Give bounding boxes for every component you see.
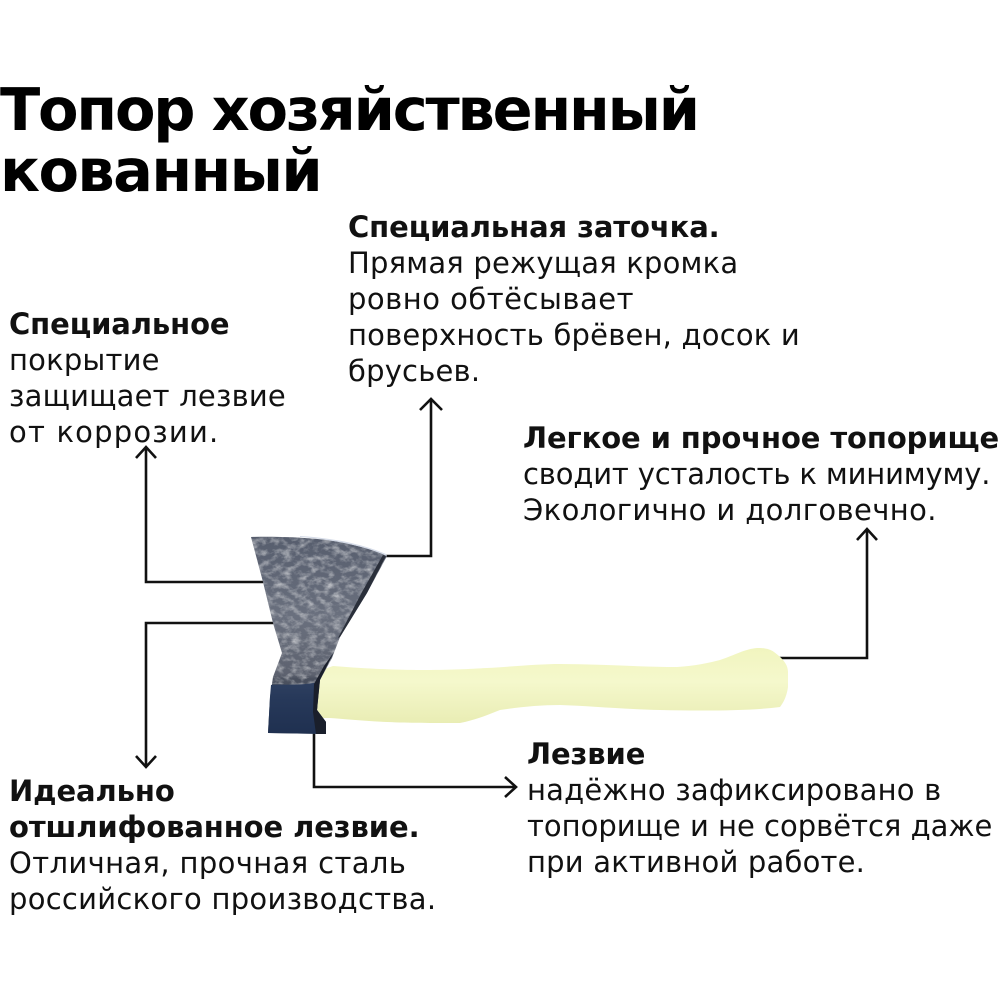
text: blade fixing bbox=[527, 737, 992, 879]
text: blade fixing: Лезвие bbox=[527, 737, 645, 771]
text: polished blade: Идеально bbox=[9, 774, 175, 808]
text: special sharpening: ровно обтёсывает bbox=[348, 282, 634, 316]
text: special sharpening: Прямая режущая кромка bbox=[348, 246, 738, 280]
arrow: handle bbox=[776, 529, 877, 658]
text: special coating: от коррозии. bbox=[9, 415, 219, 449]
text: polished blade: отшлифованное лезвие. bbox=[9, 810, 420, 844]
text: light handle: сводит усталость к минимуму. bbox=[523, 457, 990, 491]
icon: axe handle bbox=[316, 648, 788, 723]
title: Топор хозяйственный bbox=[0, 75, 698, 144]
arrow: polished blade bbox=[136, 623, 274, 767]
text: special coating: Специальное bbox=[9, 307, 229, 341]
text: light handle: Легкое и прочное топорище bbox=[523, 421, 999, 455]
arrow: sharpening bbox=[386, 399, 442, 556]
arrow: blade bbox=[314, 730, 516, 797]
text: special sharpening: Специальная заточка. bbox=[348, 210, 720, 244]
text: blade fixing: при активной работе. bbox=[527, 845, 865, 879]
arrow: coating bbox=[136, 447, 264, 582]
text: blade fixing: топорище и не сорвётся даже bbox=[527, 809, 992, 843]
text: special sharpening bbox=[348, 210, 800, 388]
text: special coating bbox=[9, 307, 286, 449]
icon: axe head bbox=[251, 536, 387, 734]
text: light handle: Экологично и долговечно. bbox=[523, 493, 937, 527]
title bbox=[0, 75, 698, 205]
text: special coating: защищает лезвие bbox=[9, 379, 286, 413]
text: polished blade bbox=[9, 774, 436, 916]
text: special sharpening: поверхность брёвен, досок и bbox=[348, 318, 800, 352]
text: light handle bbox=[523, 421, 999, 527]
text: special sharpening: брусьев. bbox=[348, 354, 480, 388]
text: polished blade: Отличная, прочная сталь bbox=[9, 846, 406, 880]
text: special coating: покрытие bbox=[9, 343, 160, 377]
text: blade fixing: надёжно зафиксировано в bbox=[527, 773, 941, 807]
text: polished blade: российского производства. bbox=[9, 882, 436, 916]
title: кованный bbox=[0, 136, 321, 205]
